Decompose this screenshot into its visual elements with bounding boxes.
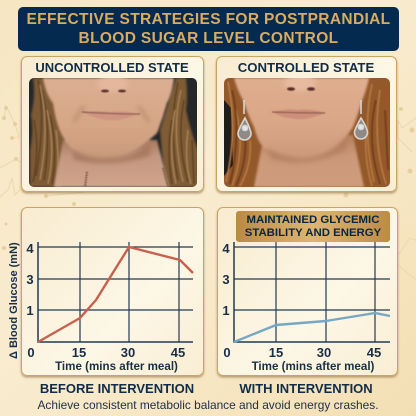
chart: with intervention: 1: [222, 303, 230, 318]
panel: with intervention chart: [217, 207, 398, 376]
chart: before intervention: 1: [26, 303, 34, 318]
caption: before intervention: BEFORE INTERVENTION: [40, 381, 194, 396]
panel: before intervention chart: [21, 207, 204, 376]
callout: maintained glycemic stability: STABILITY AND ENERGY: [245, 227, 381, 239]
chart: with intervention: 15: [269, 345, 283, 360]
chart: before intervention: 15: [72, 345, 86, 360]
panel: uncontrolled state: [21, 56, 204, 192]
chart: before intervention: 45: [171, 345, 185, 360]
chart: with intervention: 30: [317, 345, 331, 360]
photo: controlled neck and jaw with earrings: [224, 78, 390, 187]
title banner: [18, 7, 399, 51]
chart: before intervention: 4: [26, 241, 34, 256]
chart: with intervention: 0: [223, 345, 231, 360]
panel: controlled state: [216, 56, 397, 192]
callout: maintained glycemic stability: MAINTAINED GLYCEMIC: [247, 214, 379, 226]
chart: before intervention: 30: [121, 345, 135, 360]
earring: left: [238, 100, 250, 139]
photo: uncontrolled neck and jaw: [29, 78, 197, 187]
chart: before intervention: Δ Blood Glucose (mN): [8, 242, 20, 359]
chart: with intervention: 3: [222, 272, 230, 287]
chart: with intervention: 45: [367, 345, 381, 360]
caption: with intervention: WITH INTERVENTION: [239, 381, 373, 396]
chart: with intervention: 4: [222, 241, 230, 256]
callout: maintained glycemic stability: [236, 211, 390, 242]
chart: with intervention: Time (mins after meal): [252, 360, 375, 373]
title banner: EFFECTIVE STRATEGIES FOR POSTPRANDIAL: [26, 11, 390, 28]
chart: before intervention: 3: [26, 272, 34, 287]
heading: uncontrolled state: UNCONTROLLED STATE: [35, 60, 189, 75]
chart: before intervention: Time (mins after meal): [55, 360, 178, 373]
heading: controlled state: CONTROLLED STATE: [238, 60, 374, 75]
text: summary: Achieve consistent metabolic balance and avoid energy crashes.: [37, 398, 379, 412]
chart: before intervention: 0: [27, 345, 35, 360]
earring: right: [354, 100, 367, 139]
title banner: BLOOD SUGAR LEVEL CONTROL: [79, 30, 338, 46]
